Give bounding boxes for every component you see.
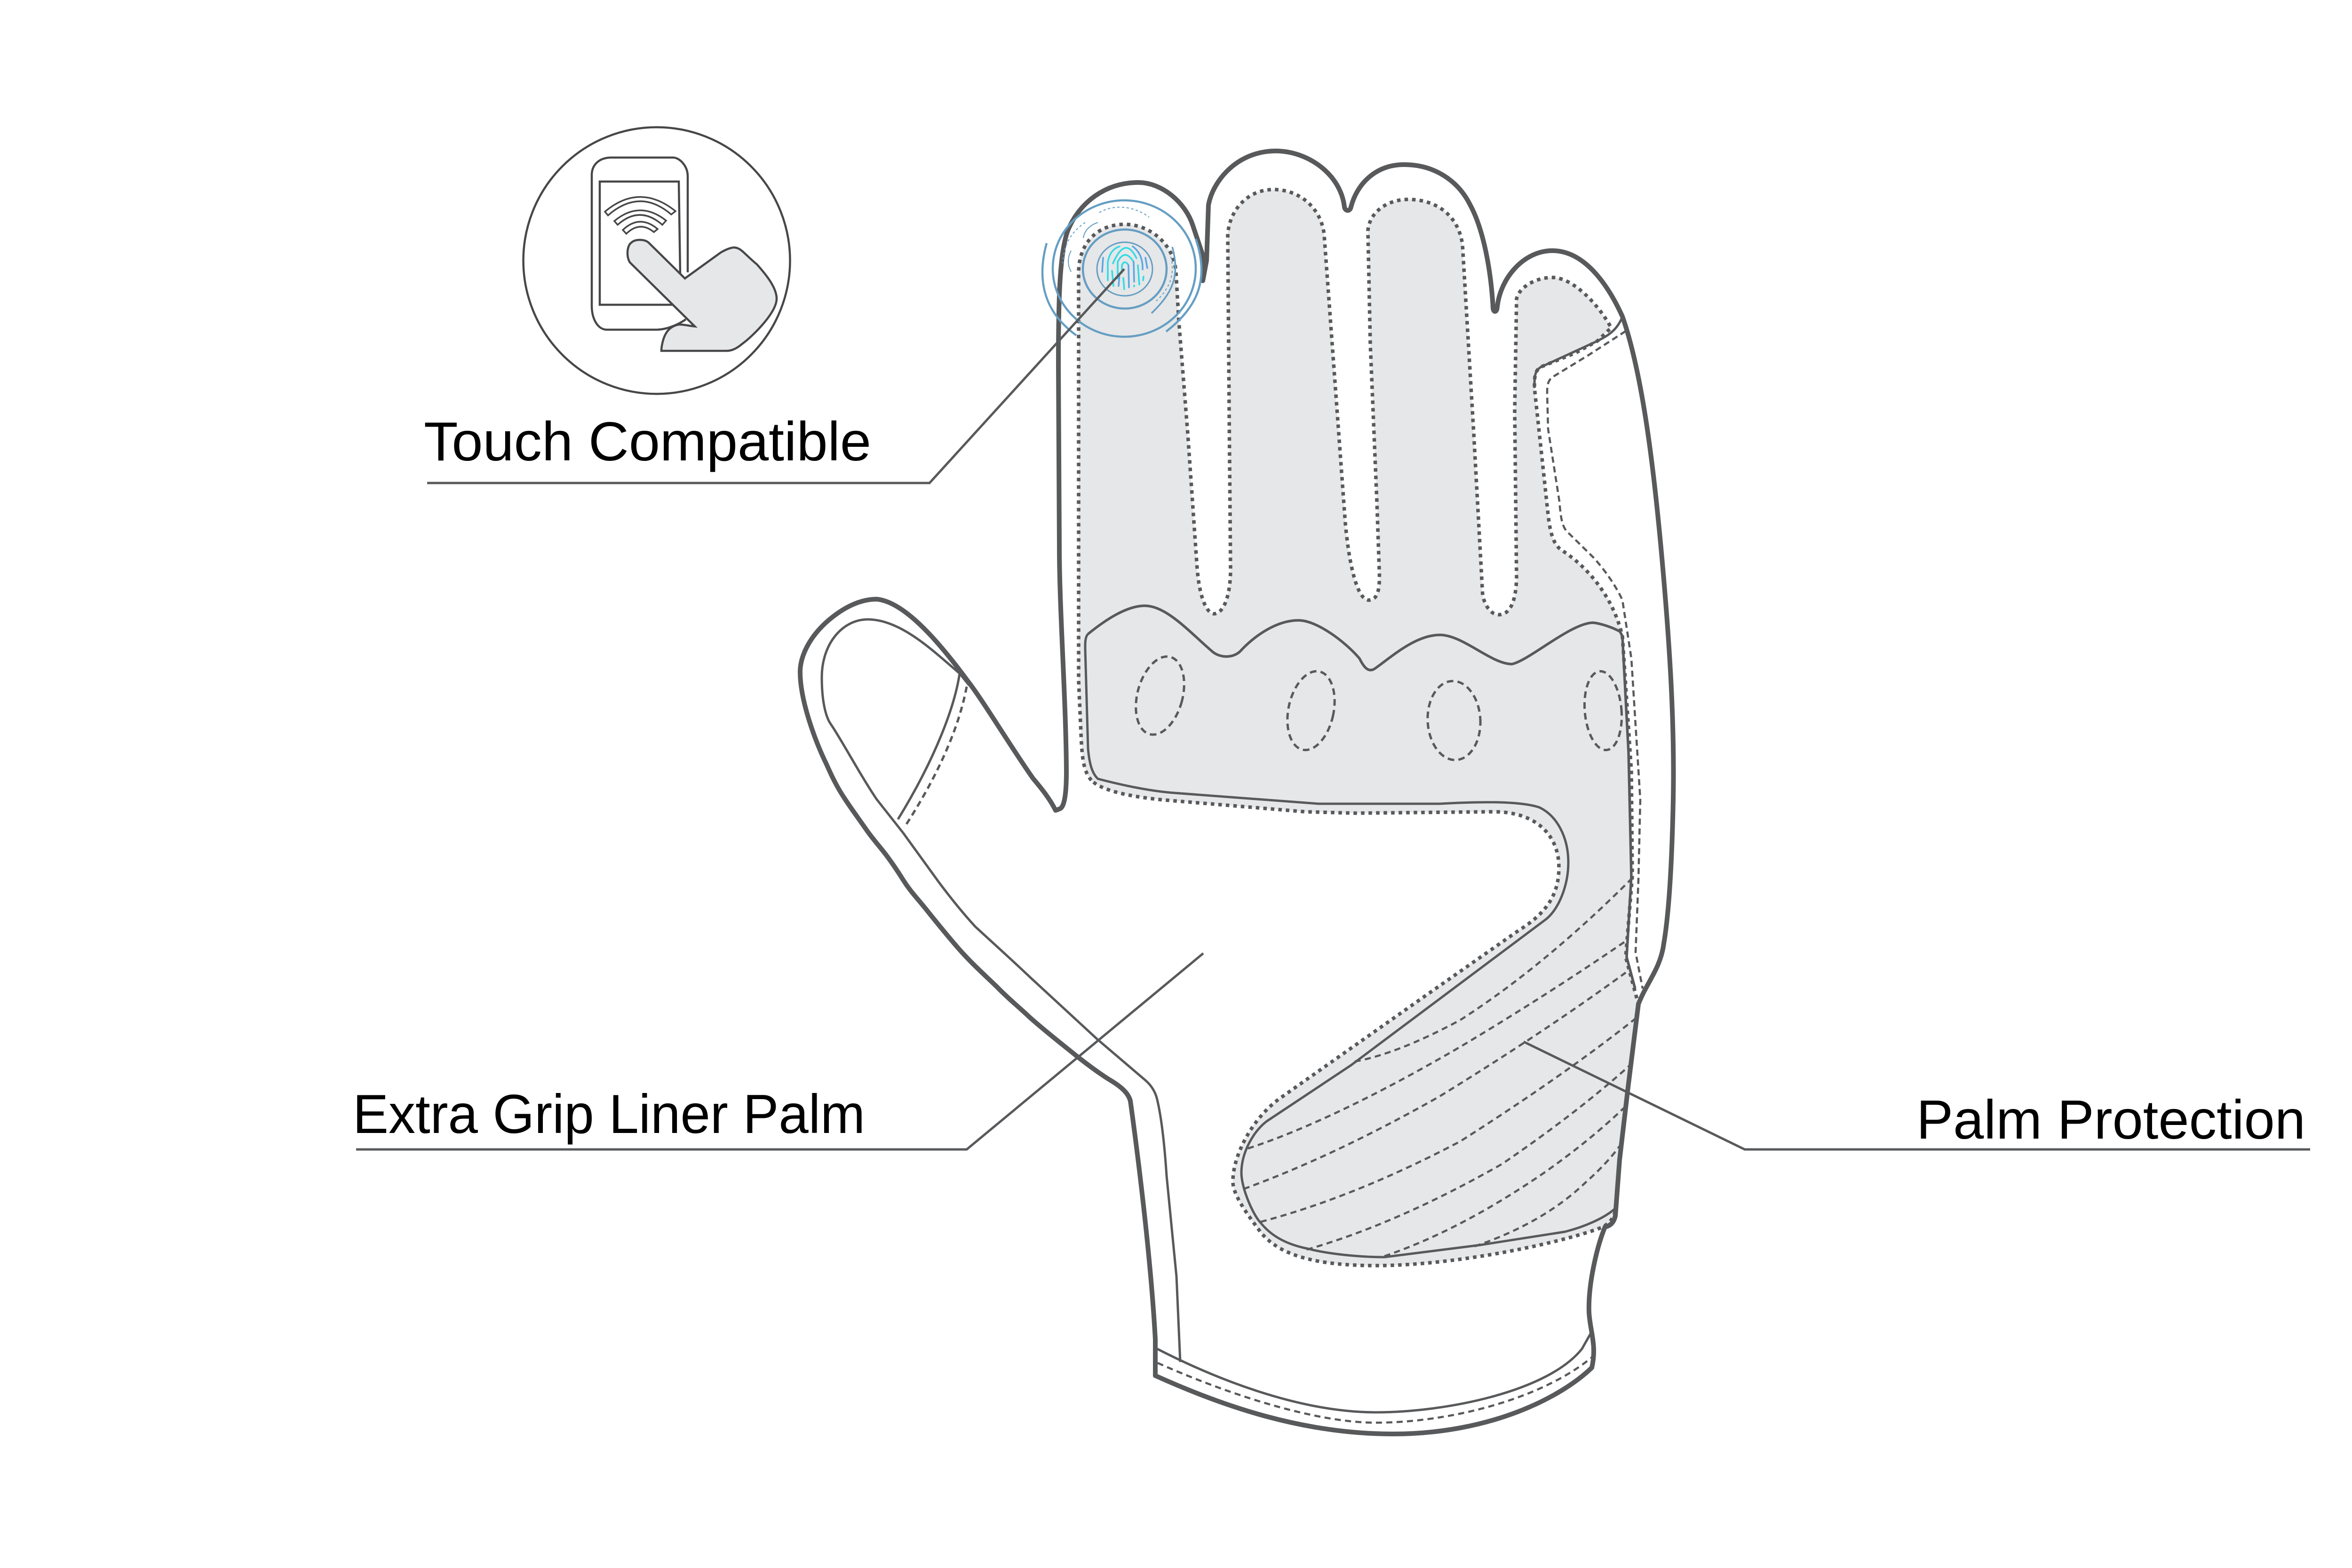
palm protection dashed ribs: [1244, 878, 1637, 1256]
rings around the fingertip: [1042, 200, 1201, 337]
knuckle panel seam: [1088, 606, 1635, 989]
thumb tip dashed stitching: [904, 687, 967, 828]
leader: extra grip liner palm: [356, 953, 1203, 1149]
thumb tip seam: [898, 673, 960, 819]
hand shape: [628, 240, 777, 351]
thumb and wrist inner line: [822, 619, 1180, 1362]
knuckle panel lower seam and palm protection outline: [1085, 634, 1614, 1257]
leader: palm protection: [1524, 1042, 2310, 1149]
leader: touch compatible: [427, 269, 1124, 483]
knuckle vent ellipses: [1128, 651, 1625, 761]
leader lines: [356, 269, 2310, 1149]
touch compatible fingertip: rings and fingerprint: [1042, 200, 1201, 337]
phone screen: [600, 182, 680, 305]
cuff seam: [1155, 1330, 1592, 1412]
cuff dashed stitching: [1158, 1355, 1594, 1423]
glove outer outline: [800, 151, 1674, 1434]
wifi signal arcs: [605, 197, 675, 234]
phone body: [592, 158, 688, 330]
right side seam line: [1534, 319, 1621, 388]
icon: phone with touching hand in a circle: [523, 127, 790, 394]
right side dashed stitching: [1547, 331, 1643, 989]
fingerprint ridges: [1102, 246, 1147, 289]
label: touch compatible: Touch Compatible: [424, 411, 871, 472]
panel: grey palm and finger padding with dotted stitching: [1079, 190, 1638, 1266]
label: palm protection: Palm Protection: [1916, 1089, 2305, 1150]
glove illustration: [800, 151, 1674, 1434]
fine arcs around the fingertip: [1063, 207, 1172, 301]
label: extra grip liner palm: Extra Grip Liner Palm: [353, 1083, 865, 1145]
icon circle: [523, 127, 790, 394]
